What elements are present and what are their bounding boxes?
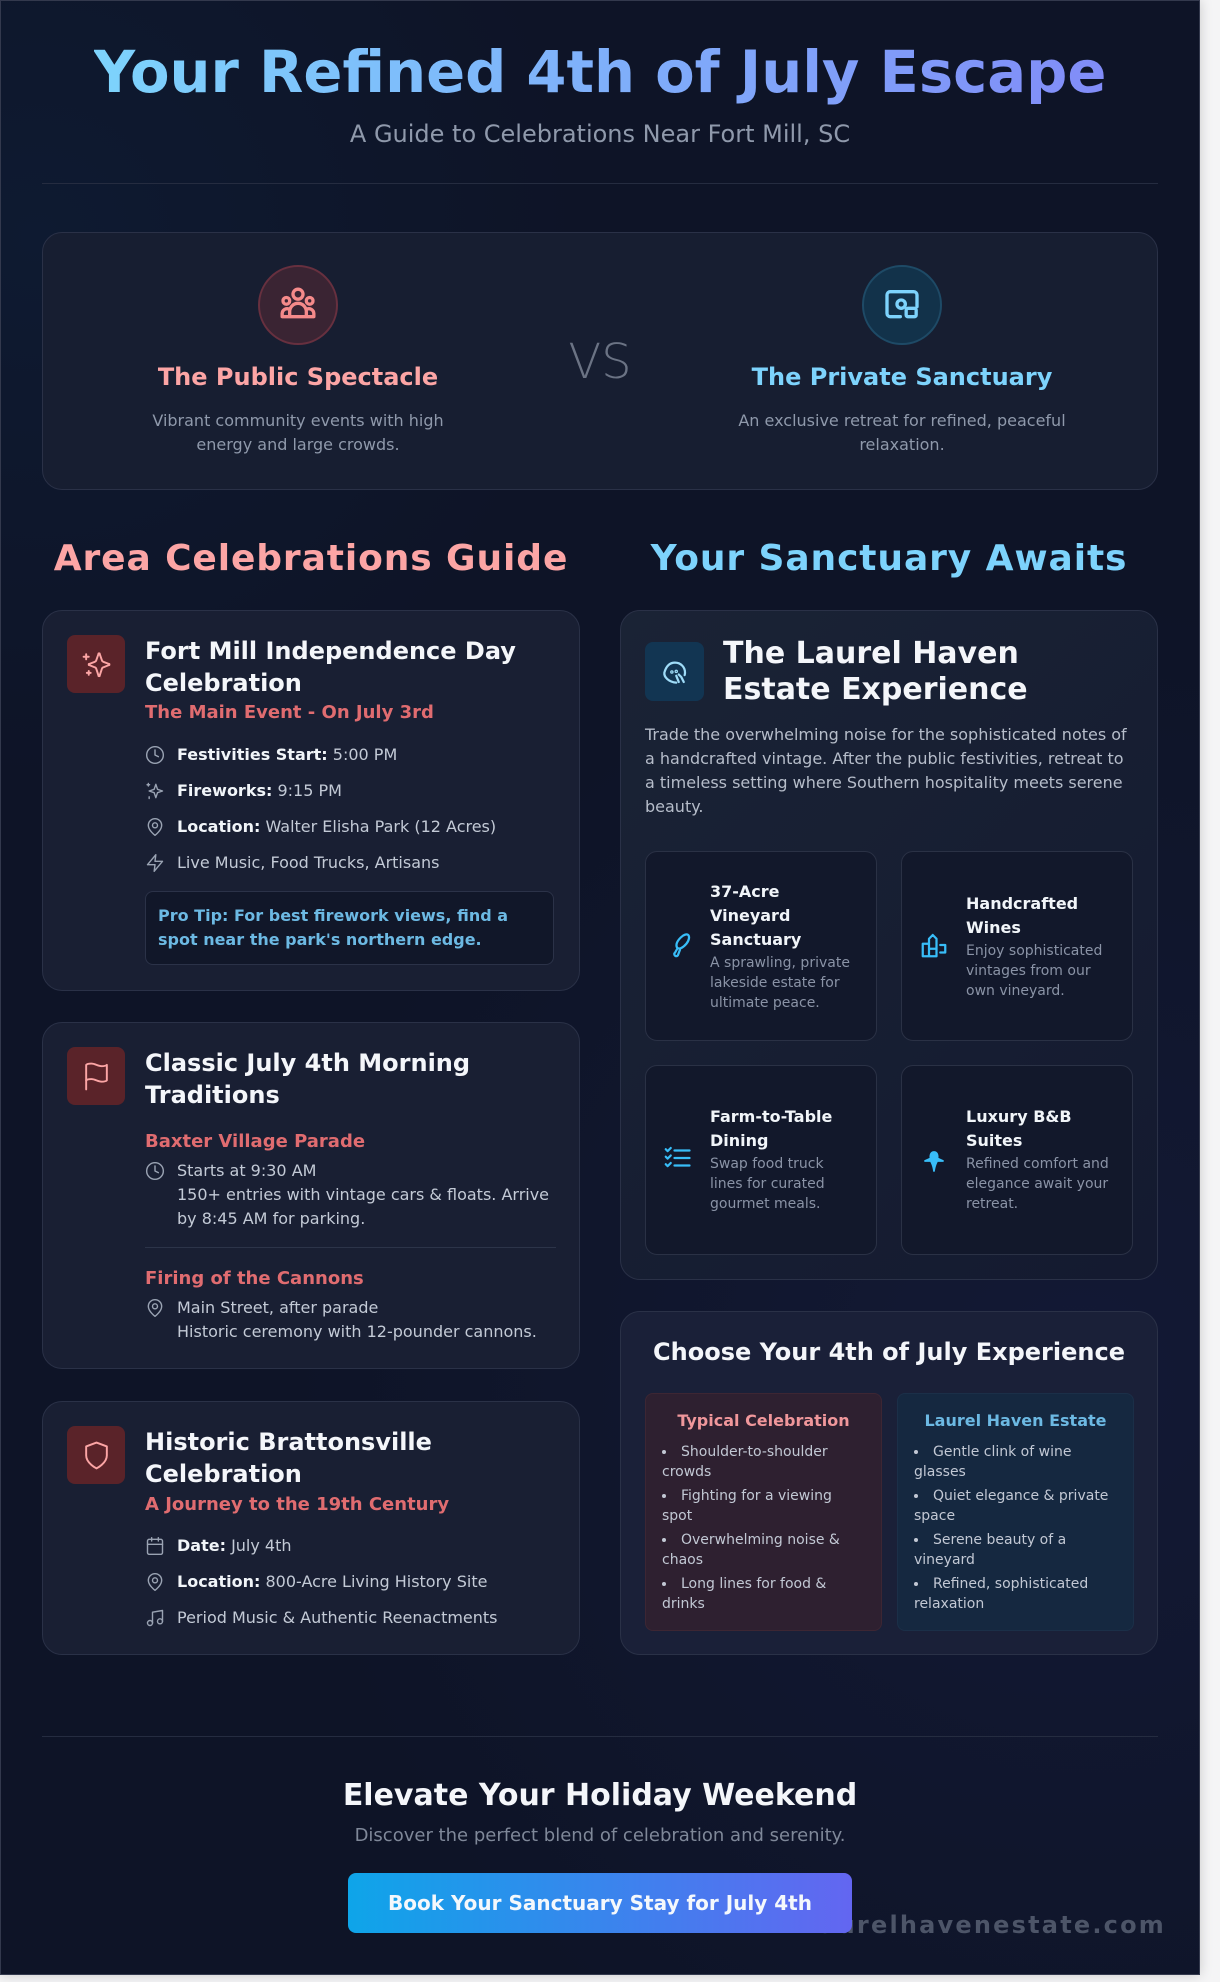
- watermark url: laurelhavenestate.com: [809, 1911, 1166, 1939]
- list: [914, 1444, 1108, 1612]
- feature: suites: [901, 1065, 1133, 1255]
- info row: festivities: Festivities Start: 5:00 PM: [177, 745, 397, 764]
- list: Long lines for food &: [681, 1576, 826, 1592]
- list: Quiet elegance & private: [933, 1488, 1108, 1504]
- list: Gentle clink of wine: [933, 1444, 1071, 1460]
- text: wines: Enjoy sophisticated: [966, 943, 1102, 959]
- panel: brattonsville: [42, 1401, 580, 1655]
- text: intro paragraph: a timeless setting where Southern hospitality meets serene: [645, 773, 1123, 792]
- icon: dining: [664, 1146, 691, 1168]
- icon: suites: [924, 1151, 944, 1172]
- info: parade details: by 8:45 AM for parking.: [177, 1209, 365, 1228]
- text: suites: Refined comfort and: [966, 1156, 1109, 1172]
- info row: location: Location: Walter Elisha Park (12 Acres): [177, 817, 496, 836]
- list: spot: [662, 1508, 692, 1524]
- footer text: Discover the perfect blend of celebration and serenity.: [355, 1825, 845, 1846]
- text: public description: Vibrant community events with high: [152, 411, 444, 430]
- text: dining: Dining: [710, 1131, 768, 1150]
- list: Refined, sophisticated: [933, 1576, 1088, 1592]
- text: private description: An exclusive retreat for refined, peaceful: [738, 411, 1066, 430]
- callout: pro tip: spot near the park's northern edge.: [158, 930, 482, 949]
- list: drinks: [662, 1596, 705, 1612]
- panel: comparison: [42, 232, 1158, 490]
- info: cannons details: Main Street, after parade: [177, 1298, 378, 1317]
- text: wines: own vineyard.: [966, 983, 1065, 999]
- heading: [145, 1049, 470, 1109]
- info: cannons details: [148, 1298, 537, 1341]
- text: vineyard: Vineyard: [710, 906, 790, 925]
- footer divider: [42, 1736, 1158, 1737]
- text: dining: Farm-to-Table: [710, 1107, 832, 1126]
- subheading: The Main Event - On July 3rd: [145, 702, 434, 723]
- text: intro paragraph: a handcrafted vintage. After the public festivities, retreat to: [645, 749, 1124, 768]
- text: dining: gourmet meals.: [710, 1196, 820, 1212]
- callout: pro tip: [145, 891, 554, 965]
- info: parade details: 150+ entries with vintage cars & floats. Arrive: [177, 1185, 549, 1204]
- text: vineyard: lakeside estate for: [710, 975, 840, 991]
- icon: public crowd: [258, 265, 338, 345]
- text: vineyard: [710, 882, 850, 1011]
- text: suites: [966, 1107, 1109, 1212]
- text: wines: Wines: [966, 918, 1021, 937]
- text: dining: Swap food truck: [710, 1156, 824, 1172]
- list: [662, 1444, 840, 1612]
- list: Serene beauty of a: [933, 1532, 1066, 1548]
- subheading: A Journey to the 19th Century: [145, 1494, 449, 1515]
- icon: private sanctuary: [862, 265, 942, 345]
- heading: Celebration: [145, 669, 302, 697]
- heading: Choose Your 4th of July Experience: [653, 1338, 1125, 1366]
- panel: choose your experience: [620, 1311, 1158, 1655]
- list: Shoulder-to-shoulder: [681, 1444, 828, 1460]
- heading: Typical Celebration: [677, 1411, 850, 1430]
- text: intro paragraph: Trade the overwhelming noise for the sophisticated notes of: [645, 725, 1127, 744]
- heading: [723, 636, 1028, 707]
- subheading: parade: Baxter Village Parade: [145, 1131, 365, 1152]
- heading: The Laurel Haven: [723, 636, 1019, 671]
- VS label: VS: [568, 334, 632, 390]
- heading: Historic Brattonsville: [145, 1428, 432, 1456]
- list: chaos: [662, 1552, 703, 1568]
- icon: wines: [922, 934, 946, 958]
- icon: vineyard: [673, 933, 690, 958]
- heading: your sanctuary awaits: Your Sanctuary Awaits: [651, 538, 1127, 579]
- panel: morning traditions: [42, 1022, 580, 1369]
- column: typical celebration: [645, 1393, 882, 1631]
- text: vineyard: Sanctuary: [710, 930, 801, 949]
- column: laurel haven: [897, 1393, 1134, 1631]
- panel: laurel haven estate: [620, 610, 1158, 1280]
- text: wines: [966, 894, 1102, 999]
- icon: shield: [67, 1426, 125, 1484]
- info row: music: Period Music & Authentic Reenactments: [177, 1608, 498, 1627]
- heading: Classic July 4th Morning: [145, 1049, 470, 1077]
- info: parade details: [146, 1161, 549, 1228]
- call to action button: [348, 1873, 852, 1933]
- heading: Fort Mill Independence Day: [145, 637, 516, 665]
- heading: [145, 637, 516, 697]
- list: space: [914, 1508, 955, 1524]
- text: suites: Luxury B&B: [966, 1107, 1072, 1126]
- text: wines: vintages from our: [966, 963, 1091, 979]
- text: dining: lines for curated: [710, 1176, 825, 1192]
- text: intro paragraph: [644, 725, 1127, 816]
- text: vineyard: A sprawling, private: [710, 955, 850, 971]
- text: public description: energy and large crowds.: [196, 435, 400, 454]
- list: crowds: [662, 1464, 711, 1480]
- text: wines: Handcrafted: [966, 894, 1078, 913]
- heading: Traditions: [145, 1081, 280, 1109]
- header divider: [42, 183, 1158, 184]
- info row: activities: Live Music, Food Trucks, Artisans: [177, 853, 439, 872]
- heading: Celebration: [145, 1460, 302, 1488]
- list: Overwhelming noise &: [681, 1532, 840, 1548]
- info: cannons details: Historic ceremony with 12-pounder cannons.: [177, 1322, 537, 1341]
- info: parade details: Starts at 9:30 AM: [177, 1161, 316, 1180]
- footer heading: Elevate Your Holiday Weekend: [343, 1778, 857, 1813]
- list: Fighting for a viewing: [681, 1488, 832, 1504]
- text: private description: relaxation.: [859, 435, 945, 454]
- text: dining: [710, 1107, 832, 1212]
- text: suites: elegance await your: [966, 1176, 1108, 1192]
- icon: estate: [645, 642, 704, 701]
- title: Your Refined 4th of July Escape: [94, 39, 1106, 106]
- text: private description: [738, 411, 1066, 454]
- subtitle: A Guide to Celebrations Near Fort Mill, SC: [350, 120, 850, 148]
- text: vineyard: 37-Acre: [710, 882, 780, 901]
- list: vineyard: [914, 1552, 975, 1568]
- feature: wines: [901, 851, 1133, 1041]
- list: glasses: [914, 1464, 966, 1480]
- heading: [145, 1428, 432, 1488]
- heading: Estate Experience: [723, 672, 1028, 707]
- info row: date: Date: July 4th: [177, 1536, 292, 1555]
- panel: fort mill event: [42, 610, 580, 991]
- info row: fireworks: Fireworks: 9:15 PM: [177, 781, 342, 800]
- heading: public spectacle: The Public Spectacle: [158, 363, 438, 391]
- text: intro paragraph: beauty.: [645, 797, 704, 816]
- heading: private sanctuary: The Private Sanctuary: [752, 363, 1052, 391]
- icon: sparkles: [67, 635, 125, 693]
- heading: Laurel Haven Estate: [924, 1411, 1106, 1430]
- text: suites: Suites: [966, 1131, 1022, 1150]
- heading: area celebrations guide: Area Celebrations Guide: [54, 538, 568, 579]
- callout: pro tip: Pro Tip: For best firework views, find a: [158, 906, 508, 925]
- call to action button: Book Your Sanctuary Stay for July 4th: [388, 1891, 812, 1915]
- feature: vineyard: [645, 851, 877, 1041]
- text: vineyard: ultimate peace.: [710, 995, 820, 1011]
- icon: flag: [67, 1047, 125, 1105]
- info row: location: Location: 800-Acre Living History Site: [177, 1572, 487, 1591]
- text: suites: retreat.: [966, 1196, 1018, 1212]
- list: relaxation: [914, 1596, 984, 1612]
- subheading: cannons: Firing of the Cannons: [145, 1268, 364, 1289]
- text: public description: [152, 411, 444, 454]
- feature: dining: [645, 1065, 877, 1255]
